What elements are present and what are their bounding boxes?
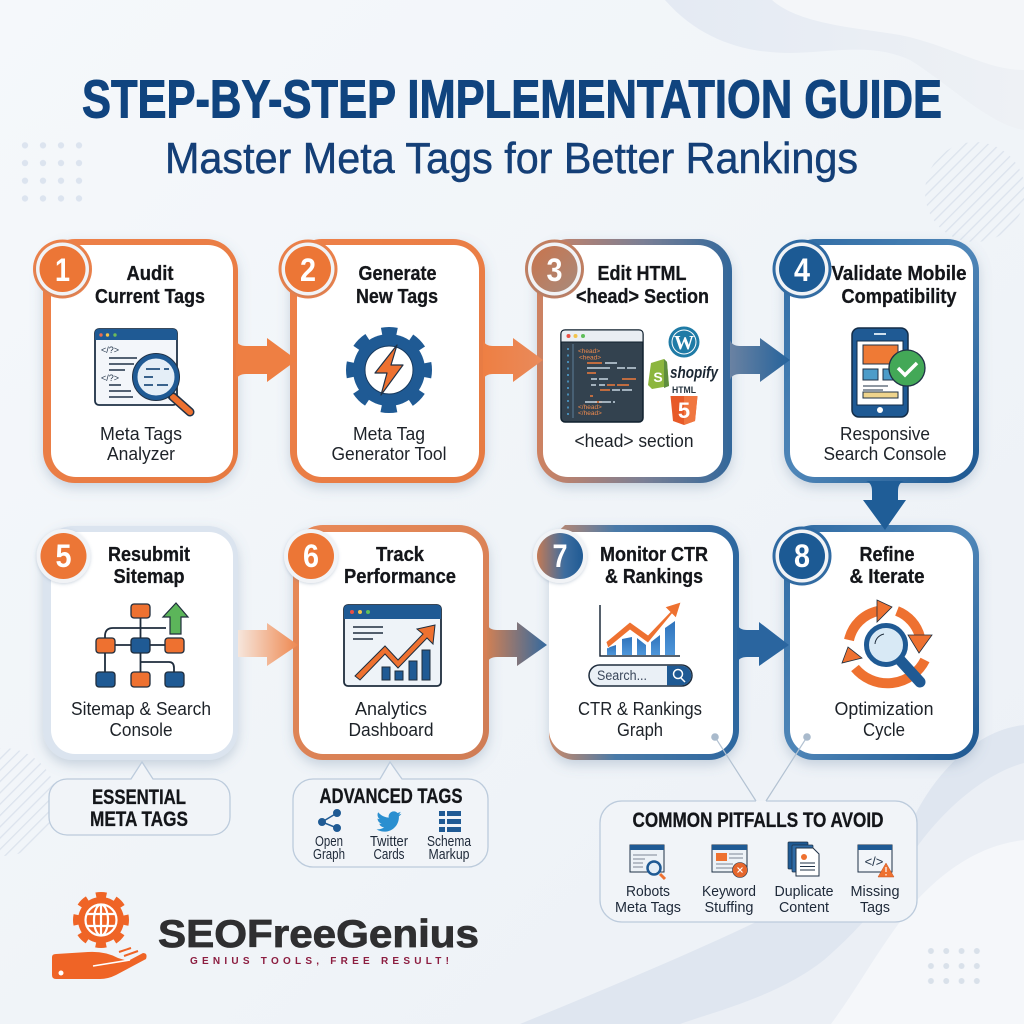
step 7 label <box>578 699 702 740</box>
step 6 heading: Performance <box>344 566 456 588</box>
step 6 label: Dashboard <box>348 720 434 740</box>
icon: code window with magnifier: </?> <box>101 345 119 355</box>
icon: analytics dashboard <box>344 605 441 686</box>
icon: gear with lightning bolt <box>351 332 427 408</box>
icon: schema table <box>439 811 461 832</box>
icon: html code editor: <head> <box>578 348 600 355</box>
step 3 label: <head> section <box>574 431 694 451</box>
pitfall labels: Meta Tags <box>615 900 681 916</box>
step 8 number: 8 <box>794 538 810 574</box>
panel: step 7 monitor <box>533 525 739 760</box>
panel: step 5 resubmit <box>36 526 238 760</box>
step 5 heading: Resubmit <box>108 544 190 566</box>
callout: common pitfalls: COMMON PITFALLS TO AVOID <box>632 809 884 832</box>
step 3 heading: Edit HTML <box>598 263 686 285</box>
step 2 label <box>332 424 446 464</box>
icon: open graph share <box>318 810 340 832</box>
icon: shopify: shopify <box>670 363 719 382</box>
icon: wordpress: W <box>674 332 694 354</box>
panel: step 1 audit <box>33 239 238 483</box>
panel: step 8 refine <box>772 525 979 760</box>
icon: code window with magnifier: </?> <box>101 373 119 383</box>
icon: html5: 5 <box>678 398 690 423</box>
subtitle: Master Meta Tags for Better Rankings <box>165 134 858 183</box>
step 5 heading <box>108 544 190 588</box>
step 1 heading: Audit <box>126 263 174 285</box>
icon: shopify: S <box>653 369 663 385</box>
step 6 number: 6 <box>303 538 319 574</box>
search bar <box>589 665 692 686</box>
icon: code window with magnifier <box>95 329 190 412</box>
step 5 heading: Sitemap <box>114 566 184 588</box>
step 1 heading <box>95 263 205 308</box>
panel: step 4 validate <box>772 239 979 483</box>
step 2 number: 2 <box>300 252 316 288</box>
step 5 label: Sitemap & Search <box>71 699 211 719</box>
advanced tag labels: Graph <box>313 847 345 863</box>
icon: html code editor: <head> <box>579 354 601 362</box>
step 3 number <box>525 240 584 298</box>
step 2 heading: New Tags <box>356 286 438 308</box>
icon: html5: HTML <box>672 385 696 395</box>
step 4 number: 4 <box>794 252 810 288</box>
step 2 number <box>278 240 338 298</box>
step 8 heading: Refine <box>860 544 914 566</box>
pitfall labels: Robots <box>626 884 670 900</box>
step 1 number <box>33 240 92 298</box>
step 4 heading: Validate Mobile <box>832 263 966 285</box>
arrow 2 to 3 <box>483 338 543 382</box>
step 2 label: Meta Tag <box>353 424 425 444</box>
panel: step 3 edit html <box>525 239 732 483</box>
step 4 heading: Compatibility <box>842 286 957 308</box>
callout: advanced tags <box>293 762 488 867</box>
panel: step 2 generate <box>278 239 485 483</box>
advanced tag labels: Twitter <box>370 834 408 850</box>
step 3 number: 3 <box>546 252 562 288</box>
step 7 number: 7 <box>552 538 568 574</box>
step 7 label: CTR & Rankings <box>578 699 702 719</box>
pitfall labels: Stuffing <box>704 900 754 916</box>
step 5 label <box>71 699 211 740</box>
pitfall labels: Missing <box>850 884 900 900</box>
icon: missing tags <box>858 845 894 877</box>
callout: essential meta tags <box>49 762 230 835</box>
arrow 7 to 8 <box>737 622 789 666</box>
step 8 label: Cycle <box>863 720 905 740</box>
step 7 heading: & Rankings <box>605 566 703 588</box>
logo: gear globe and hand <box>52 896 147 979</box>
step 8 heading: & Iterate <box>850 566 924 588</box>
step 8 number <box>772 526 832 586</box>
step 1 number: 1 <box>55 252 70 288</box>
advanced tag labels <box>313 834 472 863</box>
icon: robots meta tags <box>630 845 665 879</box>
icon: sitemap tree <box>96 603 188 687</box>
icon: rankings chart <box>600 602 681 656</box>
callout: common pitfalls <box>600 733 917 922</box>
advanced tag labels: Markup <box>428 847 470 863</box>
icon: twitter bird <box>376 811 401 832</box>
icon: html code editor: </head> <box>578 410 602 417</box>
icon: keyword stuffing <box>712 845 748 878</box>
icon: shopify <box>648 359 719 389</box>
advanced tag labels: Open <box>315 834 343 850</box>
step 4 heading <box>832 263 966 308</box>
step 8 label: Optimization <box>834 699 934 719</box>
step 4 label <box>824 424 946 464</box>
callout: essential meta tags: META TAGS <box>90 808 188 831</box>
logo tagline: GENIUS TOOLS, FREE RESULT! <box>190 956 449 967</box>
arrow 5 to 6 <box>238 623 298 666</box>
step 6 heading: Track <box>376 544 425 566</box>
icon: missing tags: </> <box>865 854 883 869</box>
step 4 label: Responsive <box>840 424 930 444</box>
step 2 heading: Generate <box>358 263 436 285</box>
icon: html5 <box>670 385 698 425</box>
step 1 heading: Current Tags <box>95 286 205 308</box>
step 6 label: Analytics <box>355 699 427 719</box>
step 7 label: Graph <box>617 720 663 740</box>
step 2 heading <box>356 263 438 308</box>
callout: advanced tags: ADVANCED TAGS <box>320 785 462 808</box>
icon: duplicate content <box>788 842 819 876</box>
icon: phone with check <box>852 328 925 417</box>
step 2 label: Generator Tool <box>332 444 446 464</box>
step 6 number <box>284 529 338 583</box>
step 6 label <box>348 699 434 740</box>
step 5 number <box>36 529 90 583</box>
step 1 label <box>100 424 182 464</box>
pitfall labels: Keyword <box>702 884 756 900</box>
logo wordmark: SEOFreeGenius <box>158 913 479 956</box>
pitfall labels: Content <box>779 900 829 916</box>
advanced tag labels: Schema <box>427 834 472 850</box>
icon: html code editor <box>561 330 643 422</box>
arrow 6 to 7 <box>487 622 547 666</box>
step 8 label <box>834 699 934 740</box>
step 1 label: Analyzer <box>107 444 175 464</box>
pitfall labels <box>615 884 900 916</box>
step 7 heading <box>600 544 708 588</box>
step 5 number: 5 <box>56 538 72 574</box>
step 7 number <box>533 529 587 583</box>
step 3 heading <box>576 263 709 308</box>
step 3 heading: <head> Section <box>576 286 709 308</box>
arrow 1 to 2 <box>236 338 297 382</box>
step 5 label: Console <box>110 720 172 740</box>
search bar: Search... <box>597 668 647 683</box>
panel: step 6 track <box>284 525 489 760</box>
advanced tag labels: Cards <box>374 847 404 863</box>
step 6 heading <box>344 544 456 588</box>
step 8 heading <box>850 544 924 588</box>
arrow 4 to 8 <box>863 481 906 530</box>
step 7 heading: Monitor CTR <box>600 544 708 566</box>
step 4 number <box>772 240 832 298</box>
pitfall labels: Tags <box>860 900 890 916</box>
callout: essential meta tags: ESSENTIAL <box>92 786 186 809</box>
arrow 3 to 4 <box>730 338 790 382</box>
icon: wordpress <box>668 326 700 358</box>
step 4 label: Search Console <box>824 444 946 464</box>
pitfall labels: Duplicate <box>774 884 834 900</box>
icon: html code editor: </head> <box>578 404 602 411</box>
connector lines <box>711 733 811 801</box>
icon: optimization cycle <box>842 600 932 683</box>
step 1 label: Meta Tags <box>100 424 182 444</box>
